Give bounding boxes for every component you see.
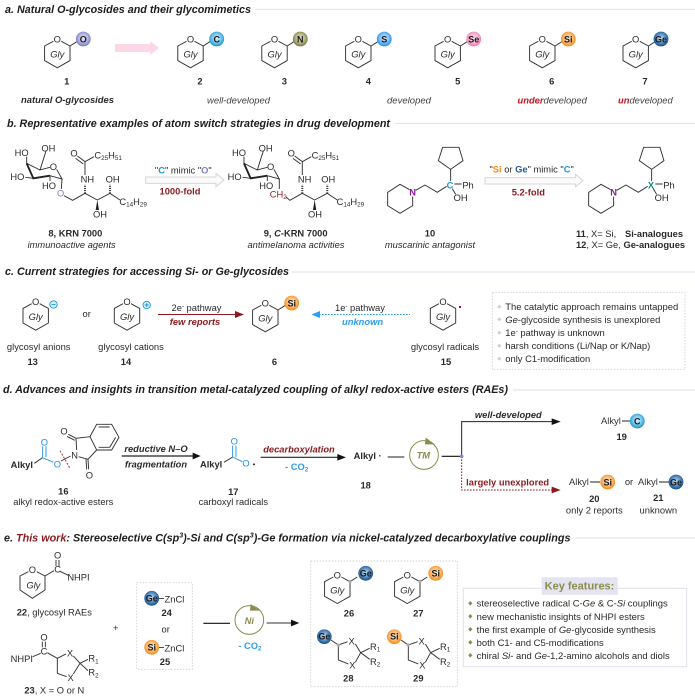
product 27: Si: [431, 569, 440, 579]
products 19, 20, 21: or: [625, 476, 633, 487]
compound 22: glycosyl RAEs: NHPI: [67, 573, 90, 583]
callout: limitations: 1e: [505, 327, 516, 338]
arrow: 2e pathway, few reports: pathway: [184, 302, 222, 313]
compound 14: glycosyl cations: O: [123, 296, 131, 307]
molecule 8: KRN 7000: O: [57, 189, 64, 199]
product 29: R: [440, 642, 447, 652]
compound 1: [45, 32, 91, 87]
products 19, 20, 21: 19: [616, 431, 627, 442]
compound 6: Si glycoside: O: [262, 298, 269, 309]
compound 16: alkyl redox-active ester: 16: [58, 486, 69, 496]
arrow: 2e pathway, few reports: few reports: [170, 316, 220, 327]
arrow: 2e pathway, few reports: 2e: [172, 302, 182, 313]
molecule 9: C-KRN 7000: HO: [259, 181, 273, 191]
panel a: natural O-glycosides and glycomimetics: [5, 4, 695, 106]
arrow: 1e pathway, unknown: 1e: [335, 302, 345, 313]
molecule 9: C-KRN 7000: HO: [228, 172, 242, 182]
product 27: Gly: [400, 584, 416, 595]
reagents box: 24 and 25: Si: [147, 643, 156, 653]
molecule 9: C-KRN 7000: CH: [270, 189, 283, 199]
Ni cycle arrow: 2: [258, 646, 262, 653]
callout: limitations: pathway is unknown: [518, 327, 605, 338]
status labels: well-developed: [207, 94, 271, 106]
compound 5: Gly: [441, 49, 456, 60]
product 27: [395, 566, 443, 618]
product 28: R: [370, 657, 377, 667]
molecule 9: C-KRN 7000: [228, 144, 365, 250]
molecule 8: KRN 7000: HO: [10, 172, 24, 182]
compound 4: 4: [366, 76, 372, 86]
compound 14: glycosyl cations: 14: [121, 356, 132, 367]
arrow: decarboxylation -CO2: decarboxylation: [263, 444, 335, 454]
molecule 9: C-KRN 7000: 29: [357, 202, 365, 209]
product 28: 28: [343, 674, 354, 684]
molecule 8: KRN 7000: NH: [81, 174, 94, 184]
compound 17: carboxyl radical: O: [231, 436, 238, 446]
molecules 11 and 12: Si and Ge analogues: Si-analogues: [625, 229, 683, 239]
molecule 8: KRN 7000: [10, 144, 147, 250]
compound 5: 5: [455, 76, 460, 86]
product 28: X: [349, 660, 356, 670]
panel b: atom switch strategies: [7, 118, 695, 250]
product 29: [387, 629, 451, 684]
product 28: R: [370, 642, 377, 652]
compound 1: O: [54, 34, 61, 45]
arrow: pink: [115, 41, 159, 55]
molecule 8: KRN 7000: OH: [106, 175, 120, 185]
molecule 10: muscarinic antagonist: OH: [454, 193, 468, 203]
compound 14: glycosyl cations: Gly: [120, 311, 135, 322]
compound 23: cyclic RAEs: 1: [95, 658, 99, 665]
compound 22: glycosyl RAEs: O: [29, 565, 36, 575]
molecule 9: C-KRN 7000: H: [350, 197, 357, 207]
compound 15: glycosyl radicals: [411, 296, 479, 367]
product 26: [325, 566, 373, 618]
compound 22: glycosyl RAEs: Gly: [26, 580, 42, 590]
arrow: 2e pathway, few reports: [158, 302, 244, 327]
molecules 11 and 12: Si and Ge analogues: [576, 147, 685, 250]
compound 15: glycosyl radicals: 15: [441, 356, 451, 367]
molecules 11 and 12: Si and Ge analogues: 11, X= Si,: [576, 229, 616, 239]
arrow: Si or Ge mimic C, 5.2-fold: [485, 164, 583, 198]
compound 3: 3: [282, 76, 287, 86]
compound 22: glycosyl RAEs: [17, 551, 92, 618]
product 27: O: [404, 569, 411, 580]
products 19, 20, 21: unknown: [640, 504, 677, 516]
compound 6: Si: [564, 34, 573, 44]
compound 2: O: [187, 34, 194, 45]
molecule 8: KRN 7000: 25: [101, 155, 109, 162]
compound 17: carboxyl radical: O: [242, 458, 250, 468]
compound 6: Si glycoside: 6: [272, 356, 277, 367]
product 28: 1: [377, 647, 381, 654]
molecule 9: C-KRN 7000: 25: [318, 155, 326, 162]
compound 16: alkyl redox-active ester: O: [41, 438, 48, 448]
compound 18: alkyl radical and TM cycle: 18: [360, 480, 371, 490]
molecule 10: muscarinic antagonist: N: [409, 188, 416, 198]
product 28: 2: [377, 662, 381, 669]
molecule 9: C-KRN 7000: 2: [283, 194, 287, 201]
compound 3: Gly: [267, 49, 283, 60]
compound 6: O: [539, 34, 546, 45]
compound 2: C: [213, 34, 220, 44]
compound 16: alkyl redox-active ester: O: [54, 460, 61, 470]
compound 13: glycosyl anions: [7, 296, 71, 367]
compound 13: glycosyl anions: glycosyl anions: [7, 341, 71, 352]
compound 4: O: [355, 34, 362, 45]
compound 18: alkyl radical and TM cycle: TM: [417, 450, 430, 460]
molecule 8: KRN 7000: immunoactive agents: [28, 240, 116, 250]
status labels: undeveloped: [618, 94, 674, 106]
compound 7: O: [632, 34, 639, 45]
heading e: )-Ge formation via nickel-catalyzed decarboxylative couplings: [253, 532, 571, 544]
compound 16: alkyl redox-active ester: Alkyl: [11, 460, 33, 470]
products 19, 20, 21: only 2 reports: [566, 504, 623, 516]
molecule 8: KRN 7000: OH: [41, 144, 55, 154]
compound 6: Si glycoside: [253, 296, 299, 367]
molecule 10: muscarinic antagonist: Ph: [462, 180, 474, 190]
molecules 11 and 12: Si and Ge analogues: N: [610, 188, 617, 198]
compound 5: O: [444, 34, 451, 45]
callout: limitations: The catalytic approach remains untapped: [505, 301, 678, 312]
key features callout: new mechanistic insights of NHPI esters: [477, 611, 645, 622]
compound 22: glycosyl RAEs: C: [54, 565, 61, 575]
compound 7: Ge: [655, 34, 667, 44]
products 19, 20, 21: 21: [653, 492, 664, 503]
molecule 9: C-KRN 7000: NH: [298, 174, 311, 184]
compound 16: alkyl redox-active ester: O: [60, 426, 68, 436]
product 27: 27: [413, 608, 424, 618]
products 19, 20, 21: 20: [589, 493, 600, 504]
status labels: natural O-glycosides: [21, 94, 114, 105]
reagents box: 24 and 25: 24: [161, 607, 173, 618]
compound 23: cyclic RAEs: 23, X = O or N: [24, 685, 84, 695]
molecules 11 and 12: Si and Ge analogues: Ph: [663, 180, 675, 190]
compound 15: glycosyl radicals: glycosyl radicals: [411, 341, 479, 352]
arrow: Si or Ge mimic C, 5.2-fold: 5.2-fold: [512, 188, 545, 198]
molecule 9: C-KRN 7000: H: [325, 150, 332, 160]
heading b: b. Representative examples of atom switch strategies in drug development: [7, 118, 390, 130]
key features callout: both C1- and C5-modifications: [477, 637, 604, 648]
molecule 8: KRN 7000: 14: [126, 202, 134, 209]
Ni cycle arrow: - CO: [238, 641, 258, 651]
key features callout: [463, 577, 687, 667]
compound 2: [178, 32, 224, 87]
compound 23: cyclic RAEs: O: [40, 633, 48, 643]
molecule 9: C-KRN 7000: OH: [308, 210, 322, 220]
branching arrows: well-developed and largely unexplored: [460, 410, 561, 493]
heading e: 3: [250, 532, 254, 540]
compound 16: alkyl redox-active ester: N: [71, 450, 78, 460]
reagents box: 24 and 25: ZnCl: [164, 642, 184, 653]
product 28: Ge: [318, 632, 330, 642]
arrow: decarboxylation -CO2: - CO: [285, 462, 305, 472]
arrow: 1e pathway, unknown: [312, 302, 410, 327]
reagents box: 24 and 25: [137, 583, 192, 669]
molecule 10: muscarinic antagonist: muscarinic antagonist: [385, 240, 476, 250]
compound 23: cyclic RAEs: NHPI: [11, 654, 33, 664]
compound 4: [346, 32, 392, 87]
compound 18: alkyl radical and TM cycle: Alkyl ·: [354, 451, 382, 461]
arrow: Si or Ge mimic C, 5.2-fold: "Si or Ge" mimic "C": [489, 164, 574, 174]
compound 13: glycosyl anions: Gly: [29, 311, 44, 322]
product 29: X: [419, 660, 426, 670]
branching arrows: well-developed and largely unexplored: largely unexplored: [466, 478, 549, 488]
molecules 11 and 12: Si and Ge analogues: OH: [655, 193, 669, 203]
arrow: C mimic O, 1000-fold: 1000-fold: [160, 186, 201, 196]
molecule 9: C-KRN 7000: OH: [259, 144, 273, 154]
heading e: e. This work: Stereoselective C(sp: [4, 532, 177, 544]
compound 6: Gly: [535, 49, 551, 60]
products box: 26 to 29: [311, 561, 457, 687]
compound 14: glycosyl cations: glycosyl cations: [98, 341, 164, 352]
arrow: 1e pathway, unknown: -: [345, 304, 347, 310]
molecule 10: muscarinic antagonist: [385, 147, 476, 250]
molecule 8: KRN 7000: 29: [140, 202, 147, 209]
molecule 8: KRN 7000: 8, KRN 7000: [48, 229, 102, 239]
compound 2: Gly: [183, 49, 199, 60]
product 29: R: [440, 657, 447, 667]
products 19, 20, 21: Ge: [670, 477, 682, 487]
compound 1: Gly: [50, 49, 66, 60]
product 26: Gly: [330, 584, 346, 595]
reagents box: 24 and 25: ZnCl: [164, 594, 184, 604]
compound 23: cyclic RAEs: 2: [95, 672, 99, 679]
molecule 8: KRN 7000: C: [119, 197, 126, 207]
compound 7: Gly: [629, 49, 644, 60]
reagents box: 24 and 25: Ge: [146, 594, 158, 604]
key features callout: the first example of Ge-glycoside synthesis: [477, 624, 656, 635]
compound 16: alkyl redox-active ester: [11, 424, 119, 507]
arrow: 1e pathway, unknown: unknown: [342, 316, 383, 327]
compound 3: [262, 32, 308, 87]
compound 2: 2: [197, 76, 203, 86]
compound 1: O: [80, 34, 87, 44]
callout: limitations: Ge-glycoside synthesis is unexplored: [505, 314, 660, 325]
molecule 9: C-KRN 7000: OH: [321, 175, 335, 185]
compound 6: [530, 32, 576, 87]
heading c: c. Current strategies for accessing Si- or Ge-glycosides: [5, 266, 289, 278]
molecule 8: KRN 7000: OH: [93, 210, 107, 220]
callout: limitations: only C1-modification: [505, 353, 590, 364]
product 28: X: [349, 637, 356, 647]
heading d: d. Advances and insights in transition metal-catalyzed coupling of alkyl redox-active esters (RAEs): [3, 384, 508, 396]
Ni cycle arrow: [203, 604, 299, 653]
product 29: Si: [390, 632, 399, 642]
product 26: Ge: [360, 569, 372, 579]
molecule 9: C-KRN 7000: 9, C-KRN 7000: [264, 229, 328, 239]
compound 5: Se: [468, 34, 479, 44]
arrow: C mimic O, 1000-fold: "C" mimic "O": [155, 165, 212, 175]
key features callout: stereoselective radical C-Ge & C-Si couplings: [477, 598, 668, 608]
compound 17: carboxyl radical: [199, 436, 268, 507]
molecules 11 and 12: Si and Ge analogues: 12, X= Ge, Ge-analogues: [576, 240, 685, 250]
product 29: 29: [413, 674, 424, 684]
compound 4: Gly: [351, 49, 367, 60]
product 28: [317, 629, 381, 684]
compound 23: cyclic RAEs: R: [88, 668, 95, 678]
compound 23: cyclic RAEs: [11, 633, 99, 695]
compound 22: glycosyl RAEs: 22, glycosyl RAEs: [17, 608, 92, 618]
compound 7: 7: [642, 76, 648, 86]
product 29: 1: [447, 647, 451, 654]
reagents box: 24 and 25: 25: [160, 656, 170, 667]
molecule 8: KRN 7000: O: [70, 149, 78, 159]
molecule 9: C-KRN 7000: HO: [232, 148, 246, 158]
plus sign: +: [113, 622, 119, 633]
compound 4: S: [381, 34, 387, 44]
panel e: this work: [4, 532, 695, 695]
text: or: or: [83, 308, 91, 319]
compound 22: glycosyl RAEs: O: [54, 551, 61, 561]
compound 6: 6: [549, 76, 554, 86]
Ni cycle arrow: Ni: [245, 616, 254, 626]
panel c: current strategies: [5, 266, 695, 369]
compound 14: glycosyl cations: [98, 296, 164, 367]
compound 15: glycosyl radicals: O: [439, 296, 447, 307]
compound 1: 1: [64, 76, 69, 86]
product 29: 2: [447, 662, 451, 669]
arrow: reductive N-O fragmentation: reductive N–O: [124, 444, 188, 454]
products 19, 20, 21: Si: [603, 477, 612, 487]
status labels: [21, 94, 674, 106]
compound 17: carboxyl radical: 17: [228, 487, 239, 497]
panel d: transition-metal coupling of RAEs: [3, 384, 695, 516]
status labels: developed: [387, 94, 432, 106]
arrow: 1e pathway, unknown: pathway: [347, 302, 385, 313]
molecule 10: muscarinic antagonist: C: [447, 180, 454, 190]
products 19, 20, 21: Alkyl: [638, 476, 658, 487]
branching arrows: well-developed and largely unexplored: well-developed: [475, 410, 542, 420]
compound 16: alkyl redox-active ester: alkyl redox-active esters: [13, 497, 114, 507]
arrow: reductive N-O fragmentation: fragmentation: [125, 460, 187, 470]
status labels: underdeveloped: [518, 94, 588, 106]
arrow: decarboxylation -CO2: [261, 444, 346, 474]
compound 6: Si glycoside: Gly: [258, 313, 274, 324]
product 26: 26: [344, 608, 354, 618]
compound 23: cyclic RAEs: X: [67, 649, 74, 659]
molecule 9: C-KRN 7000: 51: [332, 155, 340, 162]
molecule 8: KRN 7000: HO: [42, 181, 56, 191]
molecule 10: muscarinic antagonist: 10: [425, 229, 435, 239]
product 26: O: [334, 569, 341, 580]
arrow: decarboxylation -CO2: 2: [305, 467, 309, 474]
compound 3: N: [297, 34, 304, 44]
compound 23: cyclic RAEs: X: [68, 673, 75, 683]
compound 16: alkyl redox-active ester: O: [86, 470, 93, 480]
callout: limitations: [492, 293, 685, 369]
compound 5: [435, 32, 481, 87]
heading a: a. Natural O-glycosides and their glycomimetics: [5, 4, 251, 16]
heading e: )-Si and C(sp: [182, 532, 250, 544]
heading e: [4, 532, 695, 544]
compound 6: Si glycoside: Si: [287, 298, 296, 308]
molecule 8: KRN 7000: 51: [115, 155, 122, 162]
products 19, 20, 21: C: [634, 416, 641, 426]
key features callout: chiral Si- and Ge-1,2-amino alcohols and diols: [477, 650, 670, 661]
molecule 9: C-KRN 7000: antimelanoma activities: [247, 240, 345, 250]
compound 3: O: [271, 34, 278, 45]
compound 18: alkyl radical and TM cycle: [354, 438, 462, 490]
compound 23: cyclic RAEs: C: [41, 647, 48, 657]
compound 17: carboxyl radical: carboxyl radicals: [199, 497, 268, 507]
product 29: X: [419, 637, 426, 647]
arrow: C mimic O, 1000-fold: [146, 165, 224, 196]
products 19, 20, 21: Alkyl: [601, 415, 621, 426]
molecule 8: KRN 7000: C: [94, 150, 101, 160]
key features callout: Key features:: [545, 580, 614, 592]
molecule 8: KRN 7000: H: [133, 197, 140, 207]
molecule 8: KRN 7000: HO: [15, 148, 29, 158]
molecule 8: KRN 7000: H: [108, 150, 115, 160]
reagents box: 24 and 25: or: [162, 624, 170, 634]
molecule 9: C-KRN 7000: C: [337, 197, 343, 207]
callout: limitations: harsh conditions (Li/Nap or K/Nap): [505, 340, 650, 351]
molecule 9: C-KRN 7000: C: [312, 150, 318, 160]
compound 13: glycosyl anions: 13: [27, 356, 38, 367]
products 19, 20, 21: [566, 414, 683, 516]
callout: limitations: -: [516, 329, 518, 335]
molecule 8: KRN 7000: O: [50, 162, 57, 172]
molecule 9: C-KRN 7000: 14: [343, 202, 351, 209]
compound 7: [623, 32, 668, 87]
heading e: 3: [179, 532, 183, 540]
compound 17: carboxyl radical: Alkyl: [200, 459, 222, 469]
compound 13: glycosyl anions: O: [32, 296, 39, 307]
arrow: 2e pathway, few reports: -: [182, 304, 184, 310]
molecule 9: C-KRN 7000: O: [288, 149, 295, 159]
molecule 9: C-KRN 7000: O: [267, 162, 274, 172]
compound 15: glycosyl radicals: Gly: [436, 311, 451, 322]
arrow: reductive N-O fragmentation: [122, 444, 201, 470]
molecules 11 and 12: Si and Ge analogues: X: [648, 180, 655, 190]
products 19, 20, 21: Alkyl: [569, 476, 589, 487]
compound 23: cyclic RAEs: R: [88, 654, 95, 664]
